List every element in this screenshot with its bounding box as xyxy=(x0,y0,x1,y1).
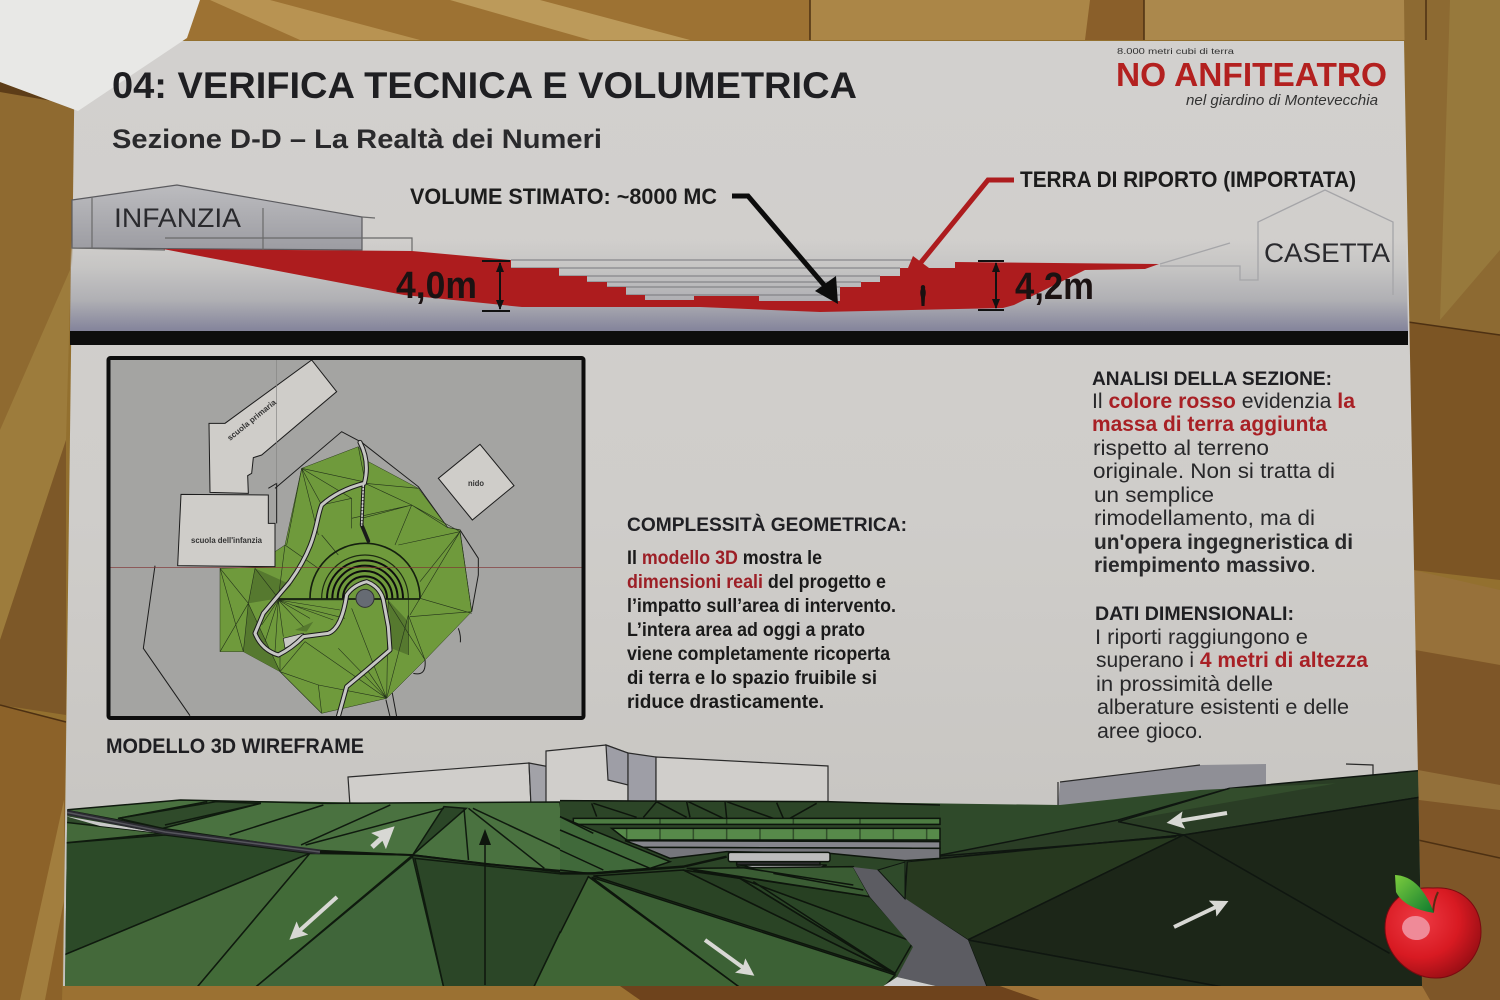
text block: complessità geometrica: dimensioni reali del progetto e xyxy=(627,572,886,593)
terrain: ridge ribbon xyxy=(65,812,585,873)
text block: analisi della sezione: un semplice xyxy=(1094,484,1214,507)
amphitheatre xyxy=(278,543,420,607)
text block: analisi della sezione: rimodellamento, ma di xyxy=(1094,507,1315,530)
text block: dati dimensionali: superano i 4 metri di altezza xyxy=(1096,649,1368,672)
text block: analisi della sezione: originale. Non si tratta di xyxy=(1093,460,1335,483)
text block: complessità geometrica xyxy=(627,514,907,713)
text block: analisi della sezione: massa di terra aggiunta xyxy=(1092,413,1327,436)
callout label: terra di riporto: TERRA DI RIPORTO (IMPORTATA) xyxy=(1020,167,1356,192)
black divider bar xyxy=(70,331,1408,345)
map labels: scuola dell'infanzia xyxy=(191,536,263,545)
footpaths xyxy=(255,442,397,717)
panel: 3D wireframe plan xyxy=(105,358,588,718)
text block: dati dimensionali xyxy=(1095,603,1368,743)
dimension: 4,2m xyxy=(978,261,1094,310)
text block: analisi della sezione xyxy=(1092,368,1355,577)
icon: red apple xyxy=(1385,875,1481,978)
logo: no anfiteatro: nel giardino di Montevecchia xyxy=(1186,92,1378,109)
text block: analisi della sezione: ANALISI DELLA SEZIONE: xyxy=(1092,368,1332,390)
dimension: 4,0m xyxy=(396,261,510,311)
map labels: nido xyxy=(468,479,484,488)
green terrain xyxy=(220,447,472,713)
logo: no anfiteatro xyxy=(1116,47,1387,109)
section stair lines xyxy=(511,260,913,295)
text block: analisi della sezione: Il colore rosso evidenzia la xyxy=(1092,390,1355,413)
section drawing ground shading xyxy=(70,240,1408,332)
3D terrain model xyxy=(60,770,1428,990)
terrain: central amphitheatre and slopes xyxy=(560,800,940,990)
text block: complessità geometrica: l’impatto sull’area di intervento. xyxy=(627,596,896,617)
terrain: black vertical arrow xyxy=(479,829,491,985)
red fill: terra di riporto xyxy=(163,249,1159,312)
sheet of white paper, top left xyxy=(0,0,200,111)
background buildings in 3D view xyxy=(348,745,1373,806)
text block: analisi della sezione: rispetto al terreno xyxy=(1093,437,1269,460)
section line xyxy=(110,567,582,568)
text block: complessità geometrica: riduce drasticamente. xyxy=(627,692,824,713)
callout label: volume: VOLUME STIMATO: ~8000 MC xyxy=(410,184,717,209)
triangulation shading xyxy=(243,568,408,672)
text block: complessità geometrica: L’intera area ad oggi a prato xyxy=(627,620,865,641)
text block: complessità geometrica: di terra e lo spazio fruibile si xyxy=(627,668,877,689)
text block: analisi della sezione: un'opera ingegneristica di xyxy=(1094,531,1353,554)
caption: modello 3D wireframe: MODELLO 3D WIREFRAME xyxy=(106,735,364,758)
outline of lot and boundary xyxy=(143,432,478,716)
text block: complessità geometrica: COMPLESSITÀ GEOMETRICA: xyxy=(627,514,907,536)
terrain: right facets xyxy=(905,771,1428,988)
map labels xyxy=(191,397,484,545)
text block: analisi della sezione: riempimento massivo. xyxy=(1094,554,1316,577)
terrain: left facets xyxy=(65,799,560,986)
logo: no anfiteatro: NO ANFITEATRO xyxy=(1116,56,1387,93)
building: casetta xyxy=(1160,190,1393,295)
slope arrows xyxy=(298,813,1227,969)
callout arrow: terra di riporto xyxy=(918,180,1014,266)
text block: dati dimensionali: I riporti raggiungono e xyxy=(1095,626,1308,649)
logo: no anfiteatro: 8.000 metri cubi di terra xyxy=(1117,47,1235,56)
dimension: 4,2m: 4,2m xyxy=(1015,266,1094,308)
building: nido xyxy=(438,444,514,520)
text block: dati dimensionali: DATI DIMENSIONALI: xyxy=(1095,603,1294,625)
building: infanzia xyxy=(72,185,412,251)
figure for scale xyxy=(920,285,926,306)
text block: complessità geometrica: viene completamente ricoperta xyxy=(627,644,890,665)
text block: dati dimensionali: aree gioco. xyxy=(1097,720,1203,743)
map labels: scuola primaria xyxy=(226,397,278,443)
dimension: 4,0m: 4,0m xyxy=(396,265,477,307)
triangulation xyxy=(220,447,472,713)
title: 04: VERIFICA TECNICA E VOLUMETRICA xyxy=(112,65,857,106)
label: infanzia: INFANZIA xyxy=(114,203,241,233)
text block: complessità geometrica: Il modello 3D mostra le xyxy=(627,548,822,569)
terrain: small facet beside road xyxy=(878,862,905,899)
callout arrow: volume xyxy=(732,196,838,304)
subtitle: Sezione D-D – La Realtà dei Numeri xyxy=(112,124,602,154)
text block: dati dimensionali: in prossimità delle xyxy=(1096,673,1273,696)
terrain: road xyxy=(853,867,987,988)
terrain: road end xyxy=(884,977,936,986)
building: scuola dell'infanzia xyxy=(178,494,275,567)
text block: dati dimensionali: alberature esistenti e delle xyxy=(1097,696,1349,719)
building: scuola primaria xyxy=(209,360,337,493)
label: casetta: CASETTA xyxy=(1264,238,1390,268)
